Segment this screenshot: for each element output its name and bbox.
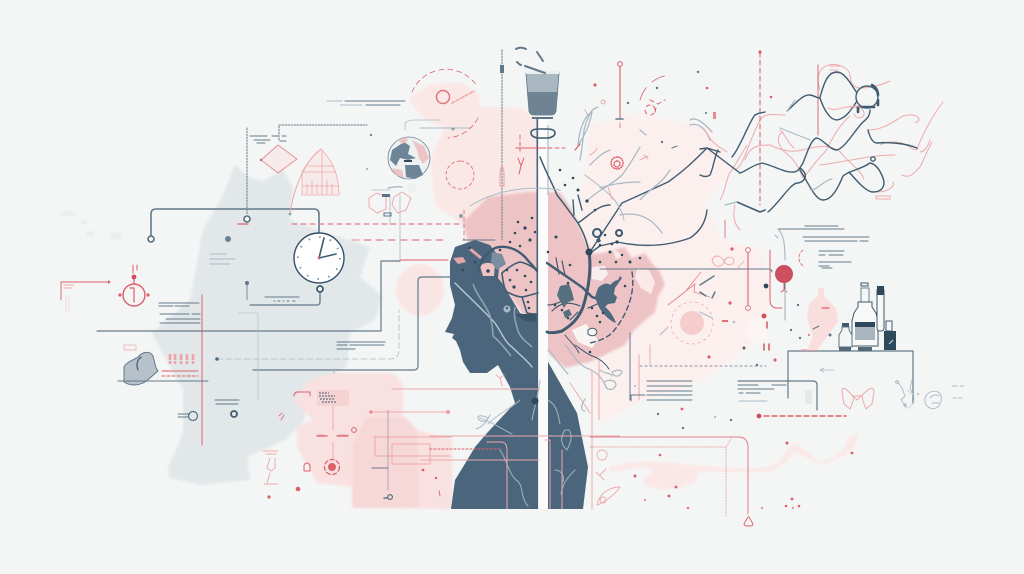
panel: pink washes — [293, 82, 858, 509]
red arrow label — [61, 280, 111, 312]
neural tree — [476, 107, 720, 506]
halo highlights — [572, 248, 655, 348]
IV bag — [516, 48, 559, 138]
squiggles: dark network — [700, 72, 917, 212]
red rows across torso — [420, 389, 620, 509]
top right small marks — [446, 62, 712, 199]
text lines: right top — [775, 226, 869, 268]
text lines: lower middle — [337, 342, 798, 401]
clock — [294, 233, 344, 292]
icon: red timer — [118, 265, 150, 306]
red vertical rule — [201, 295, 203, 445]
icon: lungs — [842, 388, 874, 409]
text lines: left — [159, 303, 200, 323]
icon: red diamond — [260, 145, 297, 173]
dotted probe line — [500, 50, 504, 240]
icon: pink flask — [807, 288, 838, 350]
flow chart in pink area — [294, 390, 356, 474]
clock base panel — [210, 254, 320, 305]
elbow connectors to head — [97, 120, 450, 400]
rings and text near head top — [412, 69, 580, 218]
squiggles: pale red network — [705, 50, 943, 230]
faint target circle — [660, 302, 713, 344]
silhouette: head and torso — [445, 240, 588, 509]
brain blobs and crescent — [463, 175, 633, 343]
icon: globe — [388, 137, 430, 179]
mini bars: left — [162, 354, 198, 376]
brain dots — [462, 169, 641, 353]
icon: red arch chart — [289, 149, 339, 215]
panel: grey wash left — [60, 165, 383, 485]
dashed red leads — [292, 224, 462, 240]
white IV column — [536, 117, 548, 509]
head details — [453, 247, 537, 367]
red connector rows lower left — [370, 389, 452, 499]
panel: bottom centre-right connector — [590, 360, 853, 526]
shelf — [738, 350, 913, 418]
text lines: top centre — [250, 101, 405, 143]
icon: grey cloud mound — [118, 345, 208, 385]
molecule sketches — [805, 380, 964, 409]
panel: brain halo — [463, 192, 665, 368]
bottles — [839, 283, 896, 351]
hourglass icon — [263, 451, 300, 499]
top-left connector with dotted leads — [148, 125, 372, 285]
right middle cluster — [600, 220, 832, 400]
icon: hexagon pair — [369, 183, 417, 216]
icon: small lever and ring — [178, 400, 284, 420]
dotted row — [640, 365, 766, 367]
